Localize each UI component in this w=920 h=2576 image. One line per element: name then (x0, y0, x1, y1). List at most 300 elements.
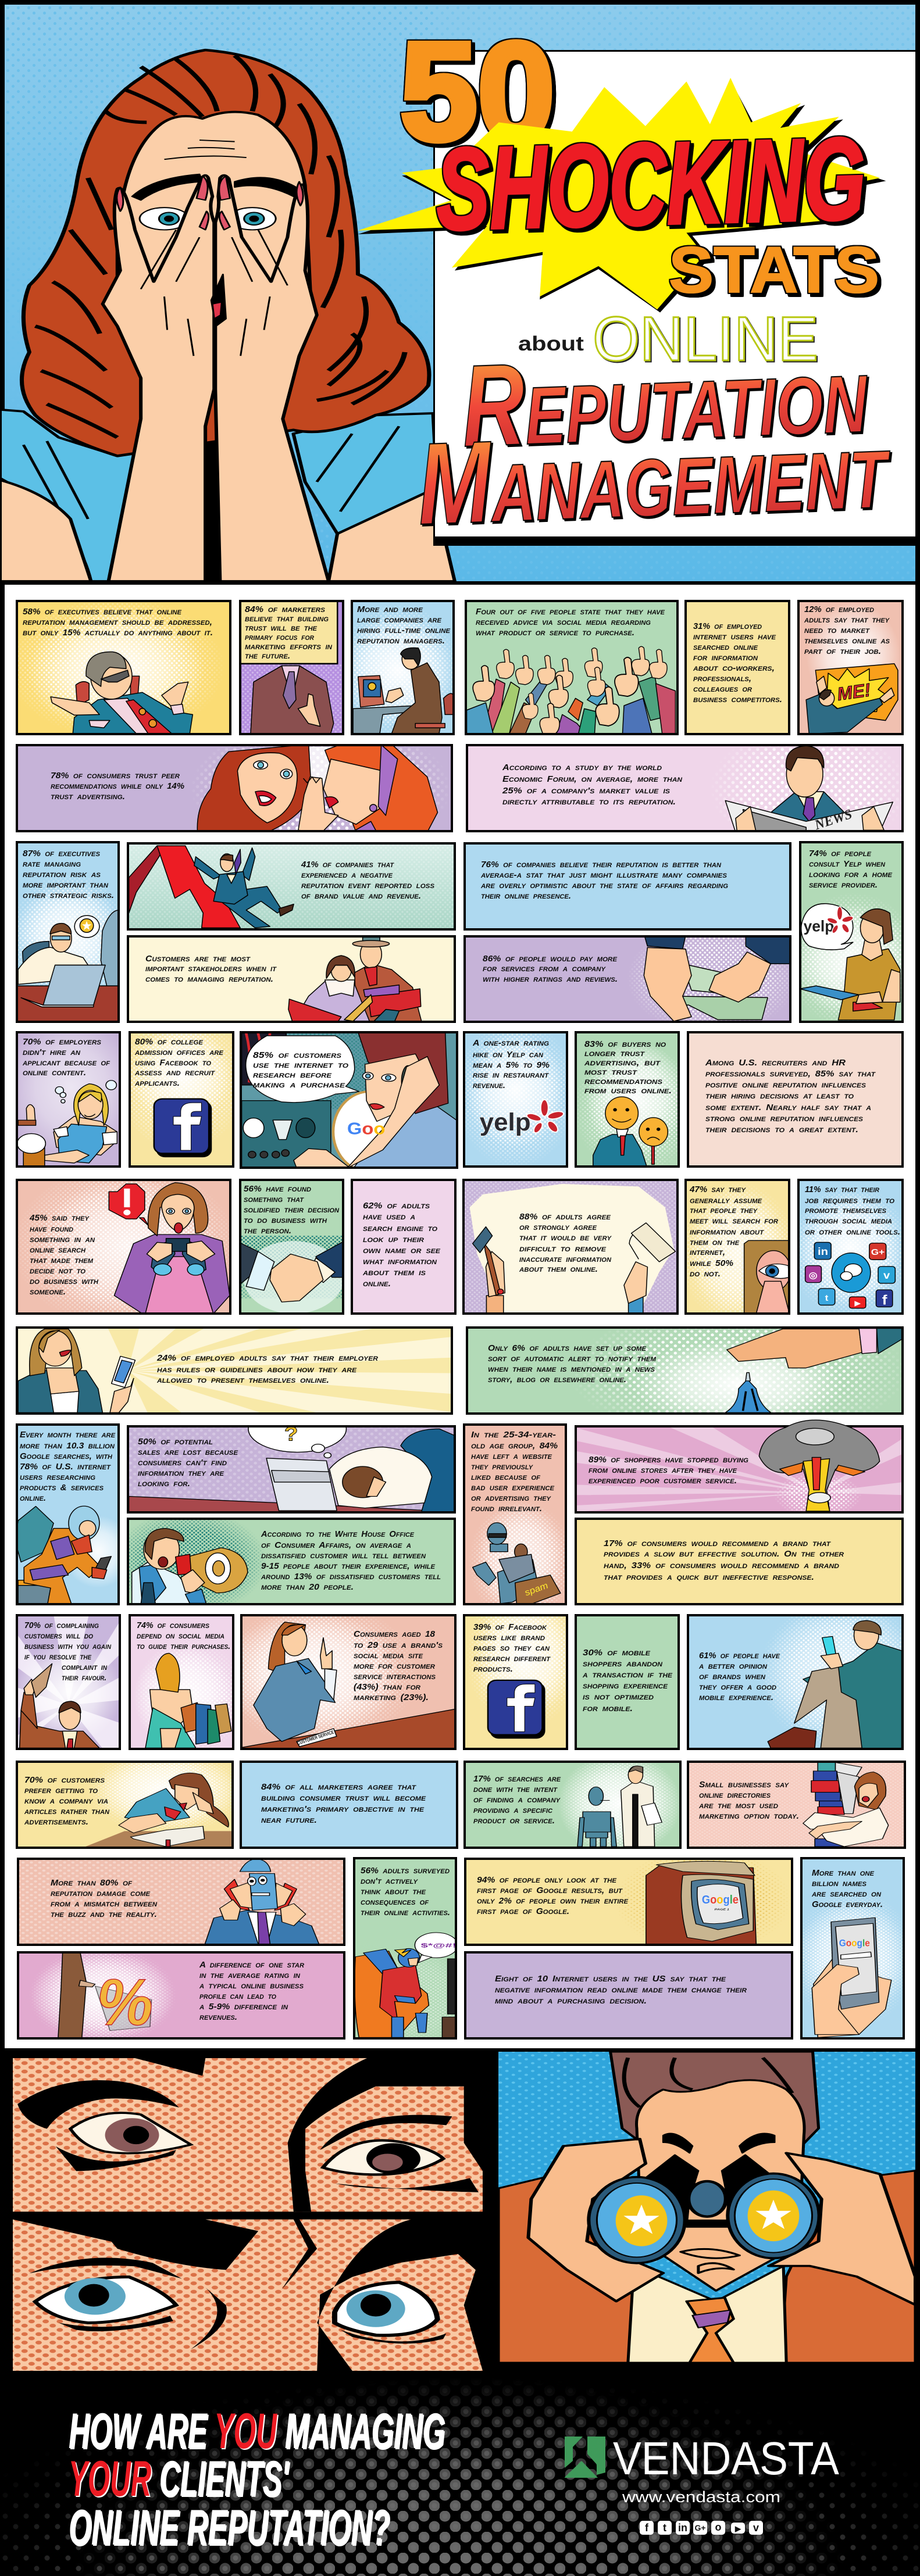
text: stat: assess and recruit (134, 1068, 215, 1078)
text: stat: internet, (690, 1247, 725, 1257)
text: stat (362, 1201, 441, 1289)
text: stat: recommendations (584, 1076, 663, 1086)
text: stat (473, 1774, 561, 1826)
text: stat (476, 607, 665, 638)
illustration: man holding smiley masks (574, 1031, 697, 1176)
panel: recruiters and HR (688, 1032, 903, 1167)
text: stat: 94% of people only look at the (477, 1875, 617, 1885)
illustration: man falling down red arrow (129, 845, 454, 928)
illustration: woman with shopping bags (129, 1614, 246, 1757)
text: stat: providing a specific (473, 1805, 553, 1815)
starburst (358, 78, 886, 313)
text: stat: promote themselves (805, 1205, 887, 1215)
text: stat: 78% of consumers trust peer (51, 771, 180, 781)
text: stat: Eight of 10 Internet users in the US say that the (495, 1974, 726, 1984)
text: stat (488, 1343, 657, 1384)
illustration: scientist and robot (463, 1749, 682, 1858)
illustration: superhero in armchair gaming (353, 1857, 475, 2046)
text: stat: think about the (361, 1887, 426, 1897)
text: stat: something in an (30, 1235, 95, 1244)
icons: social media cluster: in (818, 1246, 828, 1258)
text: stat: allowed to present themselves online. (156, 1375, 329, 1385)
text: stat (689, 1185, 778, 1279)
text: stat: articles rather than (24, 1806, 110, 1816)
text: stat (473, 1622, 551, 1674)
panel: 74% consumers social (129, 1614, 246, 1757)
illustration: customer service woman: CUSTOMER SERVICE (297, 1729, 335, 1746)
illustration: robot with spam bag: spam (523, 1580, 550, 1598)
illustration: superhero in armchair gaming: $*@#! (421, 1942, 457, 1949)
panel: only 6% alerts (466, 1305, 909, 1441)
panel: 58% executives (6, 596, 231, 738)
panel: four out of five (465, 600, 679, 736)
text: stat: of brand value and revenue. (301, 891, 421, 901)
text: stat: users like brand (473, 1633, 545, 1643)
text: speech bubble stat: making a purchase (253, 1080, 345, 1090)
panel: 86% pay more (463, 935, 791, 1023)
text: stat: mean a 5% to 9% (473, 1060, 550, 1070)
text: stat: themselves online as (804, 636, 890, 646)
icon: Yelp logo: yelp (480, 1108, 531, 1136)
text: stat: hand, 33% of consumers would recommend a brand (604, 1561, 839, 1570)
illustration: hand holding phone with Google: Google (839, 1938, 870, 1948)
text: stat (698, 1651, 780, 1702)
text: stat: what product or service to purchase. (476, 628, 634, 638)
text: stat: customers will do (24, 1631, 93, 1641)
illustration: man tipping hat (15, 1614, 122, 1750)
word about: about (518, 332, 584, 355)
illustration: woman with smartphone on sunburst (16, 1326, 453, 1415)
text: stat (24, 1775, 110, 1827)
panel: close-up of staring eyes (13, 2058, 483, 2371)
text: stat: shopping experience (583, 1681, 668, 1691)
illustration: seated man with smartphone (687, 1596, 920, 1752)
text: stat (582, 1648, 673, 1713)
text: stat: 31% of employed (693, 621, 762, 631)
text: stat: more than 20 people. (261, 1582, 354, 1592)
text: stat: have left a website (471, 1451, 552, 1461)
text: stat: mobile experience. (699, 1693, 773, 1702)
text: stat: if you resolve the (24, 1652, 92, 1662)
text: stat: believe that building (245, 614, 329, 624)
illustration: retro TV with Google (464, 1848, 793, 1953)
text: stat: of brands when (699, 1672, 766, 1681)
text: stat: experienced poor customer service. (589, 1476, 737, 1486)
text: stat: using Facebook to (135, 1058, 211, 1068)
illustration: handshake (239, 1179, 344, 1315)
text: stat: social media site (354, 1651, 423, 1661)
text: stat: Google searches, with (20, 1451, 113, 1461)
text: stat: inaccurate information (519, 1254, 612, 1264)
text: stat: business competitors. (693, 695, 782, 704)
icons: social media cluster: f (882, 1293, 887, 1308)
text: stat: more for customer (354, 1661, 435, 1671)
text: stat (705, 1058, 876, 1135)
text: stat: admission offices are (134, 1047, 224, 1057)
text: stat: 12% of employed (804, 604, 874, 614)
illustration: hand over service bell (466, 1305, 909, 1441)
text: stat: rise in restaurant (473, 1070, 549, 1080)
panel: 85% of customers research (240, 1031, 458, 1172)
text: stat: a typical online business (199, 1981, 304, 1991)
text: stat (472, 1038, 550, 1090)
illustration: businessman thumbs up (241, 602, 342, 733)
text: stat: the buzz and the reality. (51, 1909, 157, 1919)
text: stat: first page of Google results, but (477, 1886, 623, 1895)
illustration: robot with spam bag (463, 1423, 574, 1625)
text: stat (51, 1878, 158, 1919)
text: stat (51, 771, 184, 802)
text: stat: 45% said they (29, 1213, 90, 1223)
panel: 61% of people (687, 1596, 920, 1752)
panel: 11% promote through social (789, 1179, 912, 1319)
text: stat: 50% of potential (138, 1437, 213, 1447)
panel: 56% have found something (239, 1179, 344, 1315)
text: stat: someone. (30, 1287, 66, 1297)
text: stat: service interactions (354, 1672, 436, 1681)
text: stat: service provider. (809, 880, 878, 890)
panel: 70% of customers articles (16, 1746, 246, 1849)
text: stat: 78% of U.S. internet (20, 1462, 111, 1472)
text: stat: 86% of people would pay more (483, 954, 618, 964)
text: stat: meet will search for (690, 1216, 778, 1226)
social icons: ▶ (734, 2524, 741, 2533)
text: stat: 17% of searches are (473, 1774, 561, 1784)
text: stat: information about (690, 1227, 764, 1237)
panel: 12% market themselves (797, 600, 904, 735)
panel: 74% consult Yelp (799, 841, 904, 1023)
illustration: hands with hammer and paint roller (462, 1179, 679, 1315)
text: stat (483, 954, 618, 984)
text: stat: other strategic risks. (23, 890, 114, 900)
text: stat: revenue. (473, 1081, 505, 1090)
text: stat: Only 6% of adults have set up some (488, 1343, 647, 1353)
text: stat: More and more (357, 604, 423, 614)
text: stat: (43%) than for (354, 1682, 420, 1692)
text: stat: to guide their purchases. (137, 1641, 230, 1651)
illustration: hands counting money (466, 938, 789, 1021)
text: stat: Consumers aged 18 (354, 1629, 436, 1639)
text: stat: online. (20, 1493, 46, 1503)
text: stat: reputation management should be addressed, (23, 617, 212, 627)
text: stat: marketing's primary objective in the (261, 1804, 425, 1814)
text: stat: reputation risk as (23, 870, 101, 879)
illustration: eye through keyhole (679, 1179, 797, 1327)
text: stat: old age group, 84% (471, 1441, 558, 1451)
text: stat: online search (30, 1245, 86, 1255)
text: stat: More than 80% of (51, 1878, 132, 1888)
text: stat (20, 1430, 116, 1503)
illustration: retro TV with Google: PAGE 1 (715, 1909, 729, 1911)
panel: 31% employed internet users (686, 601, 789, 734)
text: stat: 74% of consumers (137, 1620, 210, 1630)
text: stat: 11% say that their (805, 1185, 879, 1194)
text: stat: trust advertising. (51, 792, 125, 802)
text: stat: when their name is mentioned in a news (488, 1364, 655, 1374)
halftone background (0, 2377, 920, 2576)
text: stat: important stakeholders when it (145, 964, 277, 974)
text: stat: about co-workers, (693, 663, 775, 673)
panel: 80% college admission (129, 1031, 234, 1168)
text: stat: them on the (690, 1237, 740, 1247)
text: stat: received advice via social media regarding (476, 617, 651, 627)
text: stat: 70% of customers (24, 1775, 105, 1785)
text: stat: of Consumer Affairs, on average a (261, 1540, 411, 1550)
text: stat (477, 1875, 629, 1916)
text: stat: 39% of Facebook (473, 1622, 547, 1632)
text: stat: from a mismatch between (51, 1899, 158, 1909)
text: stat: directly attributable to its reputation. (502, 797, 676, 807)
text: stat: or advertising they (471, 1493, 552, 1503)
text: stat: their decisions to a great extent. (705, 1125, 858, 1135)
text: stat: while 50% (690, 1258, 733, 1268)
panel: 45% found something (12, 1163, 237, 1329)
illustration: couple with gifts (129, 938, 454, 1021)
text: stat: own name or see (363, 1246, 441, 1255)
illustration: man shouting in megaphone (112, 1511, 456, 1613)
illustration: man reading newspaper: NEWS (812, 807, 854, 833)
illustration: man hanging ME poster (800, 602, 901, 733)
social icons: v (753, 2522, 759, 2534)
text: stat (519, 1212, 612, 1274)
text: stat: 47% say they (689, 1185, 747, 1194)
text: stat: from users online. (584, 1086, 672, 1096)
illustration: retro TV with Google: Google (702, 1892, 739, 1906)
text: stat (804, 604, 890, 656)
text: stat (138, 1437, 238, 1489)
text: stat (809, 849, 893, 890)
text: stat: applicants. (134, 1078, 180, 1088)
icons: social media cluster (789, 1179, 912, 1319)
icon: Facebook logo (463, 1583, 583, 1750)
text: stat: don't actively (361, 1876, 419, 1886)
panel: 56% adults surveyed (353, 1857, 475, 2046)
text: stat: advertising, but (584, 1058, 661, 1068)
text: stat: large companies are (357, 615, 442, 625)
text: stat: about them is (362, 1268, 426, 1278)
text: stat: for information (693, 653, 758, 663)
panel: small businesses (687, 1761, 906, 1849)
text: stat: online content. (23, 1068, 86, 1078)
icon: mushroom cloud overlapping frame (759, 1420, 880, 1511)
panel: 78% peer recommendations (16, 744, 453, 832)
text: stat: According to the White House Office (261, 1529, 415, 1539)
text: stat: advertisements. (24, 1817, 88, 1827)
heading: how are you managing: YOUR CLIENTS' (69, 2451, 289, 2507)
social icons: f (645, 2522, 649, 2534)
panel: 76% better than average (465, 843, 790, 929)
text: stat: In the 25-34-year- (471, 1430, 556, 1440)
illustration: woman with cart carrying percent sign (17, 1945, 345, 2046)
text: stat (244, 1184, 340, 1236)
heading: how are you managing (69, 2403, 445, 2556)
text: stat: 70% of employers (23, 1037, 102, 1047)
panel: customers stakeholders (127, 935, 456, 1023)
text: stat: 70% of complaining (24, 1620, 99, 1630)
text: stat: research different (473, 1654, 551, 1663)
text: stat: hiring full-time online (357, 625, 451, 635)
illustration: nuclear sky rays (575, 1425, 904, 1518)
panel: 25% market value (466, 744, 904, 832)
text: stat: 87% of executives (23, 849, 101, 858)
panel: 70% complaining customers (15, 1614, 122, 1750)
text: stat: 17% of consumers would recommend a brand that (604, 1539, 831, 1548)
text: stat: is not optimized (583, 1692, 654, 1702)
text: stat: that it would be very (519, 1233, 612, 1243)
text: stat (137, 1620, 230, 1651)
text: stat: product or service. (473, 1816, 555, 1826)
icons: social media cluster: ▶ (854, 1300, 861, 1307)
text: stat: from online stores after they have (589, 1465, 737, 1475)
text: stat: 84% of marketers (245, 604, 326, 614)
icons: social media cluster: v (883, 1270, 890, 1282)
text: stat: a better opinion (698, 1661, 768, 1671)
text: stat: decide not to (30, 1266, 85, 1276)
panel: one-star rating Yelp (454, 1018, 577, 1168)
text: stat (589, 1455, 748, 1486)
text: stat: most trust (584, 1067, 638, 1077)
text: stat: do business with (30, 1276, 99, 1286)
text: stat: Four out of five people state that they have (476, 607, 665, 617)
text: stat (22, 1037, 110, 1078)
text: stat: that people they (690, 1205, 758, 1215)
text: stat: search engine to (363, 1223, 437, 1233)
text: stat: 41% of companies that (301, 860, 394, 870)
text: stat: job requires them to (805, 1196, 894, 1205)
text: stat: has rules or guidelines about how they are (157, 1365, 357, 1375)
text: stat: trust will be the (245, 623, 318, 633)
panel: 24% rules or guidelines (16, 1326, 453, 1415)
illustration: surprised woman with binoculars (12, 1163, 237, 1329)
text: stat (199, 1960, 304, 2022)
text: stat (698, 1780, 799, 1821)
text: stat: depend on social media (137, 1631, 224, 1641)
text: stat: 25% of a company's market value is (502, 786, 671, 796)
text: stat: More than one (812, 1868, 875, 1878)
text: stat: online directories (699, 1790, 771, 1800)
text: stat: liked because of (471, 1472, 540, 1482)
text: stat (584, 1039, 672, 1096)
text: stat: recommendations while only 14% (51, 781, 184, 791)
text: stat: 58% of executives believe that online (23, 607, 182, 617)
text: speech bubble stat: use the internet to (253, 1060, 349, 1070)
text: stat: internet users have (693, 632, 776, 642)
icon: Facebook logo (131, 1033, 232, 1165)
text: stat (805, 1185, 900, 1237)
text: speech bubble stat: research before (253, 1070, 332, 1080)
panel: White House Office (112, 1511, 456, 1613)
text: stat: 62% of adults (363, 1201, 430, 1211)
illustration: woman covering her face (2, 49, 457, 581)
illustration: woman with cart carrying percent sign: % (97, 1966, 153, 2039)
text: stat: According to a study by the world (502, 763, 662, 772)
panel: more than 80% damage (17, 1858, 345, 1946)
text: stat: to do business with (244, 1215, 327, 1225)
text: stat: 76% of companies believe their reputation is better than (481, 860, 722, 870)
text: stat: story, blog or elsewhere online. (488, 1375, 626, 1384)
text: stat: first page of Google. (477, 1906, 569, 1916)
panel: 50% of potential sales (127, 1405, 456, 1514)
illustration: radio operator woman with speech bubble: Goo (347, 1119, 385, 1138)
text: stat: part of their job. (804, 646, 881, 656)
text: stat: prefer getting to (24, 1786, 98, 1795)
text: stat: complaint in (62, 1662, 108, 1672)
text: stat (502, 763, 683, 807)
panel: 88% of adults agree (462, 1179, 679, 1315)
text: stat: strong online reputation influences (705, 1114, 864, 1124)
text: stat: generally assume (690, 1196, 762, 1205)
text: stat: searched online (693, 642, 758, 652)
text: stat: for services from a company (483, 964, 607, 974)
panel: 62% of adults (352, 1180, 455, 1314)
text: stat: done with the intent (473, 1784, 558, 1794)
panel: consumers aged 18 to 29 (216, 1601, 457, 1750)
illustration: man hanging ME poster: ME! (836, 679, 872, 704)
text: stat: A difference of one star (199, 1960, 304, 1970)
text: stat: marketing (23%). (354, 1693, 429, 1702)
text: stat: average-a stat that just might illustrate many companies (480, 870, 728, 880)
text: stat (29, 1213, 99, 1297)
text: stat: building consumer trust will become (261, 1793, 426, 1803)
text: stat (245, 604, 333, 661)
text: stat: have found (30, 1224, 73, 1234)
illustration: man in chair shrugging (18, 602, 229, 733)
text: stat: that provides a quick but ineffective response. (604, 1572, 814, 1582)
text: stat: are the most used (698, 1801, 778, 1811)
text: stat: are searched on (811, 1889, 882, 1899)
text: stat: consumers can't find (138, 1458, 227, 1468)
text: stat: didn't hire an (23, 1047, 81, 1057)
text: stat: through social media (805, 1216, 892, 1226)
text: stat: dissatisfied customer will tell between (261, 1551, 426, 1561)
text: stat: more than 10.3 billion (20, 1441, 115, 1451)
panel: large companies hiring (351, 600, 455, 735)
panel: 30% of mobile shoppers (576, 1615, 679, 1749)
text: stat (23, 849, 114, 900)
text: stat: their hiring decisions at least to (705, 1091, 854, 1101)
text: stat: 89% of shoppers have stopped buying (589, 1455, 748, 1465)
text: stat: Customers are the most (145, 954, 251, 964)
white speech card (433, 50, 915, 546)
text: stat (811, 1868, 883, 1909)
text: stat: looking for. (138, 1479, 190, 1489)
text: stat: sort of automatic alert to notify them (488, 1354, 657, 1364)
icon: Yelp logo (454, 1018, 577, 1168)
panel: 83% of buyers (574, 1031, 697, 1176)
text: stat (354, 1629, 443, 1702)
text: stat: they offer a good (699, 1682, 776, 1692)
text: stat: of finding a company (473, 1795, 561, 1805)
text: stat: solidified their decision (244, 1205, 340, 1215)
text: stat: business with you again (24, 1641, 112, 1651)
panel: 47% say they assume (679, 1179, 797, 1327)
text: stat: 56% have found (244, 1184, 311, 1194)
text: stat (471, 1430, 558, 1514)
text: stat: negative information read online made them change their (495, 1985, 747, 1995)
text: stat: near future. (261, 1815, 317, 1825)
text: stat: found irrelevant. (471, 1504, 542, 1514)
text: stat: difficult to remove (519, 1244, 607, 1254)
text: stat (604, 1539, 844, 1582)
text: stat: reputation event reported loss (301, 881, 435, 890)
text: stat: marketing option today. (699, 1811, 799, 1821)
text: stat: need to market (804, 625, 870, 635)
text: stat: products. (473, 1664, 513, 1674)
text: stat: colleagues or (693, 684, 752, 694)
social icons: G+ (694, 2523, 706, 2532)
text: stat: that made them (30, 1255, 94, 1265)
text: stat (24, 1620, 112, 1683)
